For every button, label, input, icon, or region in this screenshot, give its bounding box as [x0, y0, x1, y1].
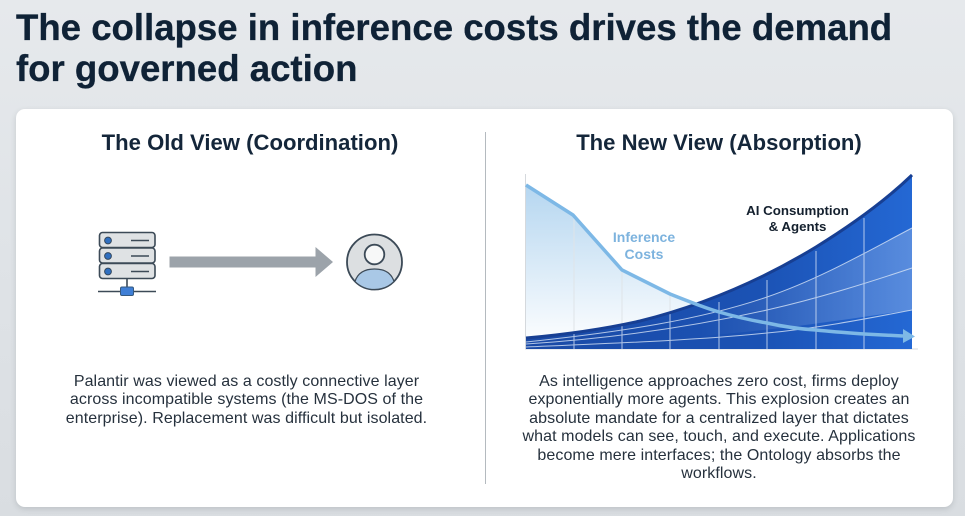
- text block: new view description: [522, 373, 915, 482]
- label: inference costs: Costs: [625, 246, 664, 262]
- line: AI consumption: [526, 175, 912, 338]
- text block: new view description: what models can see, touch, and execute. Applications: [523, 428, 915, 445]
- heading: the old view: The Old View (Coordination): [102, 130, 398, 155]
- label: AI consumption and agents: AI Consumption: [746, 203, 849, 218]
- title: [16, 7, 892, 89]
- text block: old view description: [66, 373, 427, 427]
- icon: server rack: [98, 232, 156, 296]
- grid lines: consumption area: [526, 218, 912, 349]
- text block: new view description: workflows.: [681, 465, 757, 482]
- arrow: old view flow: [170, 247, 333, 277]
- icon: user avatar: [347, 234, 402, 290]
- area: inference costs: [526, 185, 719, 349]
- chart: inference costs versus AI consumption: [525, 174, 918, 350]
- area: AI consumption: [526, 175, 912, 349]
- title: The collapse in inference costs drives the demand: [16, 7, 892, 48]
- label: inference costs: Inference: [613, 229, 675, 245]
- highlight band on consumption area: [526, 228, 912, 347]
- text block: new view description: absolute mandate for a centralized layer that dictates: [529, 410, 909, 427]
- panel divider: [484, 132, 486, 484]
- label: AI consumption and agents: & Agents: [769, 219, 826, 234]
- panel: comparison card: [16, 109, 953, 507]
- axes: [526, 174, 918, 349]
- text block: new view description: exponentially more agents. This explosion creates an: [528, 391, 909, 408]
- text block: old view description: Palantir was viewed as a costly connective layer: [74, 373, 419, 390]
- text block: new view description: As intelligence approaches zero cost, firms deploy: [539, 373, 899, 390]
- line and arrow: inference costs: [526, 185, 915, 343]
- old view diagram: server, arrow and user: [98, 232, 403, 296]
- text block: old view description: across incompatible systems (the MS-DOS of the: [70, 391, 423, 408]
- grid lines: inference area: [574, 216, 670, 336]
- title: for governed action: [16, 48, 357, 89]
- heading: the new view: The New View (Absorption): [576, 130, 862, 155]
- text block: new view description: become mere interfaces; the Ontology absorbs the: [537, 447, 901, 464]
- text block: old view description: enterprise). Replacement was difficult but isolated.: [66, 410, 427, 427]
